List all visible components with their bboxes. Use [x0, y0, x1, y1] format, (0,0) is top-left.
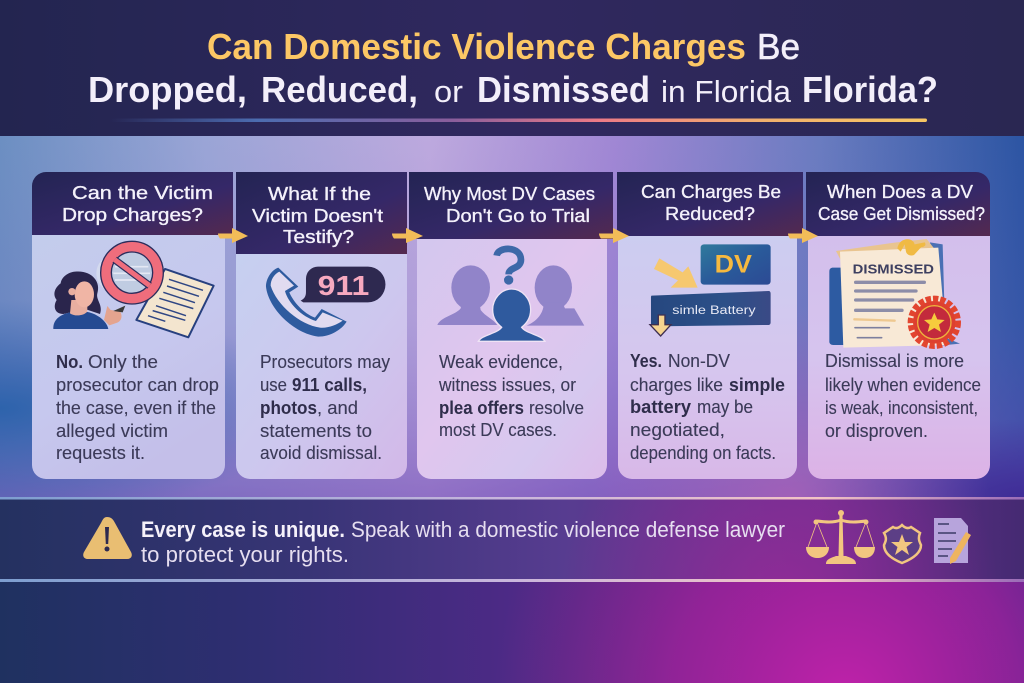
body text: [56, 352, 219, 463]
body text: most DV cases.: [439, 420, 557, 440]
body text: statements to: [260, 421, 372, 441]
icon: DV reduced to simple battery: DV: [715, 250, 752, 278]
heading: What If the: [268, 183, 371, 204]
icon: woman with no sign and document: [53, 247, 214, 337]
arrow: card 4 to 5: [788, 228, 818, 243]
panel: what if the victim does not testify: [236, 172, 407, 479]
body text: Only the: [88, 352, 158, 372]
title: Reduced,: [261, 69, 418, 110]
panel: when does a DV case get dismissed: [806, 172, 990, 479]
body text: plea offers: [439, 398, 524, 418]
heading: Case Get Dismissed?: [818, 203, 985, 224]
heading: [818, 181, 985, 224]
panel: why most DV cases do not go to trial: [409, 172, 613, 479]
footer text: [141, 517, 785, 567]
body text: resolve: [529, 398, 584, 418]
body text: likely when evidence: [825, 375, 981, 395]
panel: can charges be reduced: [617, 172, 803, 479]
body text: 911 calls,: [292, 375, 367, 395]
body text: prosecutor can drop: [56, 375, 219, 395]
body text: may be: [697, 397, 753, 417]
heading: Testify?: [283, 226, 354, 247]
heading: Can the Victim: [72, 182, 213, 203]
body text: battery: [630, 397, 691, 417]
icon: DV reduced to simple battery: [650, 244, 771, 336]
icon: scales of justice: [806, 510, 875, 564]
heading: Why Most DV Cases: [424, 183, 595, 204]
icon: dismissed document with seal: [829, 239, 960, 348]
footer text: to protect your rights.: [141, 542, 349, 567]
heading: [62, 182, 213, 225]
body text: alleged victim: [56, 421, 168, 441]
footer text: Speak with a domestic violence defense lawyer: [351, 517, 785, 542]
heading: Don't Go to Trial: [446, 205, 590, 226]
heading: When Does a DV: [827, 181, 974, 202]
title: in Florida: [661, 74, 792, 109]
body text: negotiated,: [630, 420, 725, 440]
icon: dismissed document with seal: DISMISSED: [853, 262, 934, 276]
body text: Weak evidence,: [439, 352, 563, 372]
icon: three silhouettes with question mark: [437, 249, 584, 341]
footer text: Every case is unique.: [141, 517, 345, 542]
body text: use: [260, 375, 287, 395]
body text: Yes.: [630, 351, 662, 371]
body text: [260, 352, 390, 463]
arrow: card 3 to 4: [599, 228, 629, 243]
icon: phone with 911 bubble: 911: [318, 270, 369, 301]
icon: phone with 911 bubble: [266, 267, 385, 337]
body text: simple: [729, 375, 785, 395]
body text: No.: [56, 352, 83, 372]
body text: is weak, inconsistent,: [825, 398, 978, 418]
panel: can the victim drop charges: [32, 172, 233, 479]
title: Dismissed: [477, 69, 650, 110]
heading: [252, 183, 383, 247]
title: Florida?: [802, 69, 938, 110]
icon: warning triangle: [83, 517, 132, 559]
body text: , and: [317, 398, 358, 418]
title: Be: [757, 26, 800, 67]
title: or: [434, 74, 463, 109]
body text: [438, 352, 584, 440]
body text: Non-DV: [668, 351, 730, 371]
body text: avoid dismissal.: [260, 443, 382, 463]
header band: [0, 0, 1024, 136]
heading: Can Charges Be: [641, 181, 781, 202]
title: Dropped,: [88, 69, 247, 110]
icon: document with pen: [934, 518, 971, 564]
icon: DV reduced to simple battery: simle Battery: [672, 303, 756, 317]
body text: the case, even if the: [56, 398, 216, 418]
body text: charges like: [630, 375, 723, 395]
arrow: card 1 to 2: [218, 228, 248, 243]
icon: police badge: [884, 525, 921, 563]
body text: photos: [260, 398, 317, 418]
title: Can Domestic Violence Charges: [207, 26, 746, 67]
body text: Dismissal is more: [825, 351, 964, 371]
footer band: [0, 497, 1024, 582]
body text: witness issues, or: [438, 375, 576, 395]
body text: requests it.: [56, 443, 145, 463]
body text: [630, 351, 785, 463]
body text: [825, 351, 981, 441]
title underline: [110, 118, 927, 122]
body text: Prosecutors may: [260, 352, 390, 372]
heading: [641, 181, 781, 224]
heading: [424, 183, 595, 226]
heading: Drop Charges?: [62, 204, 203, 225]
body text: depending on facts.: [630, 443, 776, 463]
heading: Reduced?: [665, 203, 755, 224]
title: [88, 26, 938, 110]
heading: Victim Doesn't: [252, 205, 383, 226]
arrow: card 2 to 3: [392, 228, 423, 243]
body text: or disproven.: [825, 421, 928, 441]
